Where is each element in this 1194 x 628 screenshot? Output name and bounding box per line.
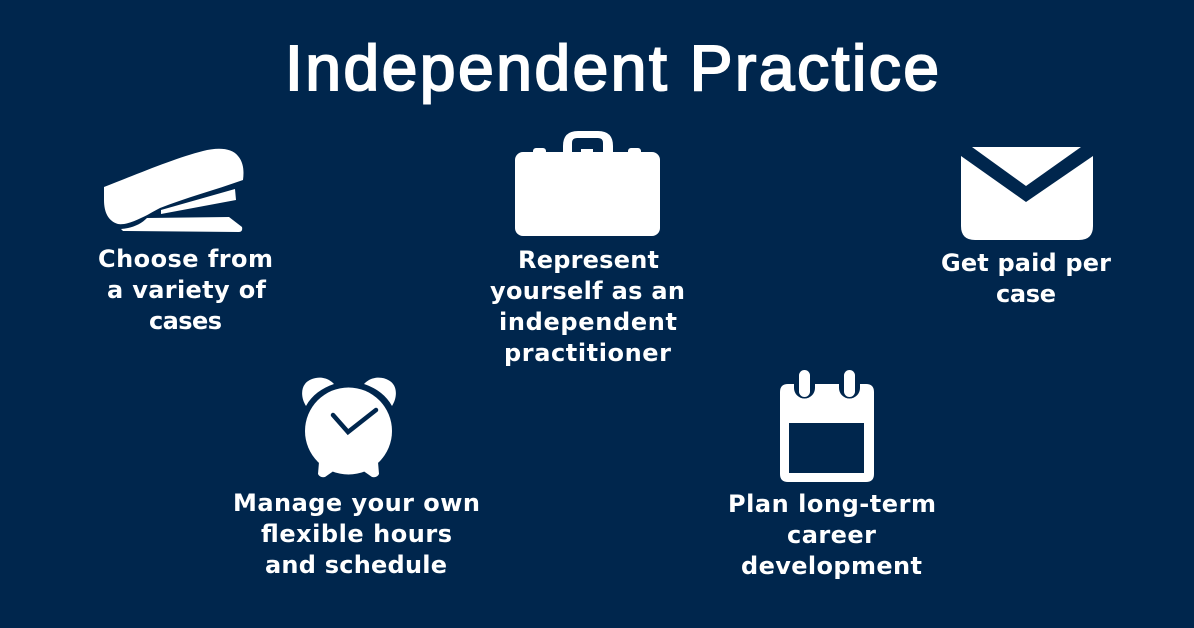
label: choose from a variety of cases: cases <box>149 307 222 335</box>
item: career development <box>728 370 936 580</box>
item: paid per case <box>941 147 1111 308</box>
label: manage your own flexible hours and schedule: flexible hours <box>261 520 452 548</box>
label: get paid per case: Get paid per <box>941 249 1111 277</box>
title: Independent Practice <box>285 32 939 104</box>
label: plan long-term career development: development <box>741 552 922 580</box>
item: independent practitioner <box>490 131 685 367</box>
icon: alarm clock <box>302 378 396 477</box>
label: choose from a variety of cases: Choose from <box>98 245 273 273</box>
label: represent yourself as an independent practitioner: independent <box>499 308 677 336</box>
label: represent yourself as an independent practitioner: Represent <box>518 246 659 274</box>
label: choose from a variety of cases: a variety of <box>107 276 267 304</box>
icon: envelope <box>961 147 1093 240</box>
label: get paid per case <box>941 249 1111 308</box>
label: represent yourself as an independent practitioner <box>490 246 685 367</box>
label: represent yourself as an independent practitioner: yourself as an <box>490 277 685 305</box>
label: plan long-term career development <box>728 490 936 580</box>
label: choose from a variety of cases <box>98 245 273 335</box>
label: plan long-term career development: Plan long-term <box>728 490 936 518</box>
label: manage your own flexible hours and schedule: and schedule <box>265 551 447 579</box>
label: manage your own flexible hours and schedule: Manage your own <box>233 489 480 517</box>
label: represent yourself as an independent practitioner: practitioner <box>504 339 671 367</box>
item: choose cases <box>98 149 273 335</box>
label: get paid per case: case <box>996 280 1056 308</box>
label: manage your own flexible hours and schedule <box>233 489 480 579</box>
icon: briefcase <box>515 131 660 236</box>
icon: calendar <box>780 370 874 482</box>
label: plan long-term career development: career <box>787 521 876 549</box>
item: flexible hours <box>233 378 480 579</box>
icon: stapler <box>104 149 243 232</box>
